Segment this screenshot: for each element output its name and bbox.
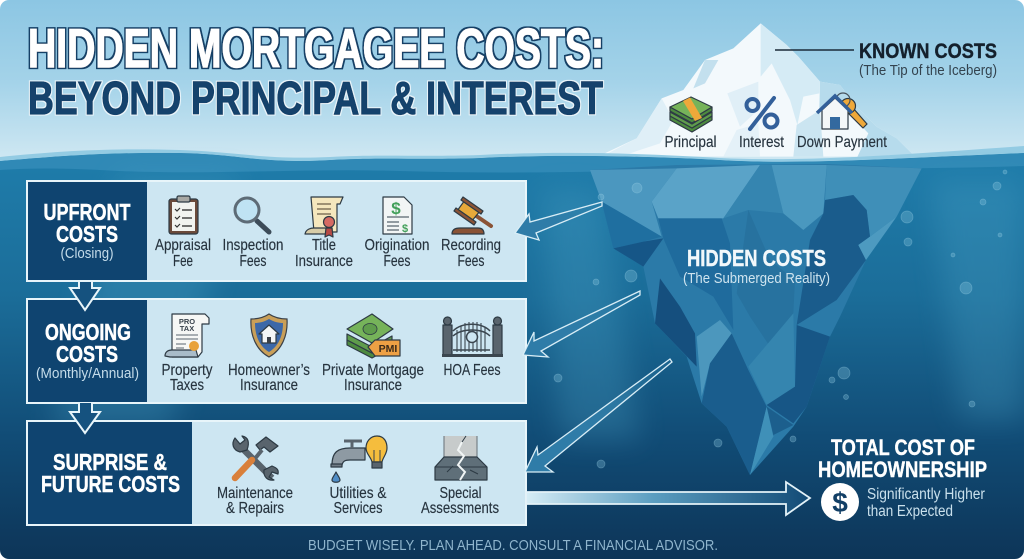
icon: dollar circle: $ [832, 487, 848, 518]
arrow: iceberg to surprise costs [525, 359, 672, 472]
item: maintenance and repairs: & Repairs [226, 500, 284, 517]
total cost callout: than Expected [867, 503, 953, 520]
item: appraisal fee: Fee [173, 253, 193, 270]
known item: down payment [797, 93, 887, 151]
title: HIDDEN MORTGAGEE COSTS: [28, 17, 604, 79]
item: special assessments [421, 436, 499, 517]
item: maintenance and repairs [217, 436, 293, 517]
icon: document with dollar: $ [402, 223, 408, 235]
light rays [50, 175, 1024, 440]
icon: percent [746, 98, 778, 129]
known item: principal [664, 97, 716, 151]
item: recording fees: Recording [441, 237, 501, 254]
hidden costs label [684, 250, 830, 286]
known item: interest: Interest [739, 134, 784, 151]
panel: surprise and future costs [27, 421, 526, 525]
water [0, 153, 1024, 559]
item: appraisal fee: Appraisal [155, 237, 211, 254]
item: recording fees [441, 197, 501, 270]
item: property taxes: Property [162, 362, 212, 379]
item: utilities and services: Utilities & [330, 485, 387, 502]
item: homeowner's insurance: Insurance [240, 377, 298, 394]
icon: house and key [817, 93, 867, 129]
item: origination fees [364, 197, 430, 270]
icon: magnifying glass [235, 198, 269, 232]
item: appraisal fee [155, 196, 211, 270]
panel heading: upfront: (Closing) [60, 245, 114, 262]
icon: cracked foundation [435, 436, 487, 480]
icon: clipboard [169, 196, 198, 234]
item: title insurance [295, 197, 353, 270]
panel: upfront costs [27, 181, 526, 281]
known item: principal: Principal [664, 134, 716, 151]
icon: tax scroll: TAX [180, 324, 194, 333]
arrow: ongoing to surprise [70, 403, 100, 433]
item: origination fees: Fees [384, 253, 410, 270]
panel heading: surprise: FUTURE COSTS [41, 471, 180, 497]
item: private mortgage insurance: Private Mortgage [322, 362, 424, 379]
arrow: to total cost [526, 482, 810, 515]
item: special assessments: Assessments [421, 500, 499, 517]
panel heading: upfront: UPFRONT [44, 199, 130, 225]
total cost callout: TOTAL COST OF [831, 435, 975, 460]
arrow: upfront to ongoing [70, 282, 100, 310]
title: BEYOND PRINCIPAL & INTEREST [28, 72, 603, 124]
panel heading: ongoing: ONGOING [45, 319, 131, 345]
panel heading: ongoing: (Monthly/Annual) [36, 365, 139, 382]
item: private mortgage insurance: Insurance [344, 377, 402, 394]
icon: cash stack [670, 97, 712, 132]
icon: house shield [251, 314, 287, 357]
arrow: iceberg to upfront costs [515, 202, 602, 240]
surface waves [0, 153, 1024, 172]
item: homeowner's insurance [228, 314, 310, 394]
known item: down payment: Down Payment [797, 134, 887, 151]
panel heading: surprise: SURPRISE & [53, 449, 167, 475]
total cost callout: Significantly Higher [867, 486, 985, 503]
known costs label: KNOWN COSTS [859, 40, 997, 63]
arrow: iceberg to ongoing costs [523, 291, 640, 357]
item: inspection fees: Inspection [222, 237, 284, 254]
item: property taxes: Taxes [170, 377, 204, 394]
bubbles [554, 170, 1007, 468]
panel heading: surprise [28, 422, 192, 524]
icon: deed scroll [305, 197, 343, 237]
iceberg tip [603, 23, 915, 158]
item: property taxes [162, 314, 212, 394]
background: sky [0, 0, 1024, 165]
item: title insurance: Title [312, 237, 336, 254]
icon: dollar circle [821, 483, 859, 521]
item: hoa fees [442, 317, 503, 379]
panel heading: upfront [28, 182, 147, 280]
icon: tax scroll: PRO [179, 317, 195, 326]
panel heading: ongoing: COSTS [56, 341, 118, 367]
known costs label: (The Tip of the Iceberg) [859, 62, 997, 79]
hidden costs label: (The Submerged Reality) [683, 270, 830, 287]
icon: cash with PMI tag: PMI [379, 343, 397, 355]
item: recording fees: Fees [458, 253, 484, 270]
icon: gate [442, 317, 503, 357]
icon: document with dollar: $ [391, 199, 401, 218]
panel: ongoing costs [27, 299, 526, 403]
known item: interest [739, 98, 784, 151]
panel heading: upfront: COSTS [56, 221, 118, 247]
item: hoa fees: HOA Fees [444, 362, 500, 379]
total cost callout: HOMEOWNERSHIP [818, 457, 987, 482]
total cost callout [818, 435, 987, 521]
item: inspection fees [222, 198, 284, 270]
item: origination fees: Origination [364, 237, 430, 254]
item: maintenance and repairs: Maintenance [217, 485, 293, 502]
item: utilities and services [330, 436, 387, 517]
icon: faucet and light bulb [331, 436, 387, 482]
iceberg submerged [590, 164, 922, 475]
item: private mortgage insurance [322, 314, 424, 394]
icon: gavel [452, 197, 491, 234]
icon: wrench and hammer [233, 436, 278, 480]
known costs label [775, 43, 996, 78]
item: inspection fees: Fees [240, 253, 266, 270]
panel heading: ongoing [28, 300, 147, 402]
item: special assessments: Special [440, 485, 482, 502]
footer: BUDGET WISELY. PLAN AHEAD. CONSULT A FINANCIAL ADVISOR. [308, 537, 718, 554]
hidden costs label: HIDDEN COSTS [687, 245, 826, 271]
title [28, 26, 604, 116]
icon: tax scroll [165, 314, 209, 357]
item: title insurance: Insurance [295, 253, 353, 270]
item: homeowner's insurance: Homeowner’s [228, 362, 310, 379]
icon: document with dollar [383, 197, 412, 235]
item: utilities and services: Services [334, 500, 382, 517]
